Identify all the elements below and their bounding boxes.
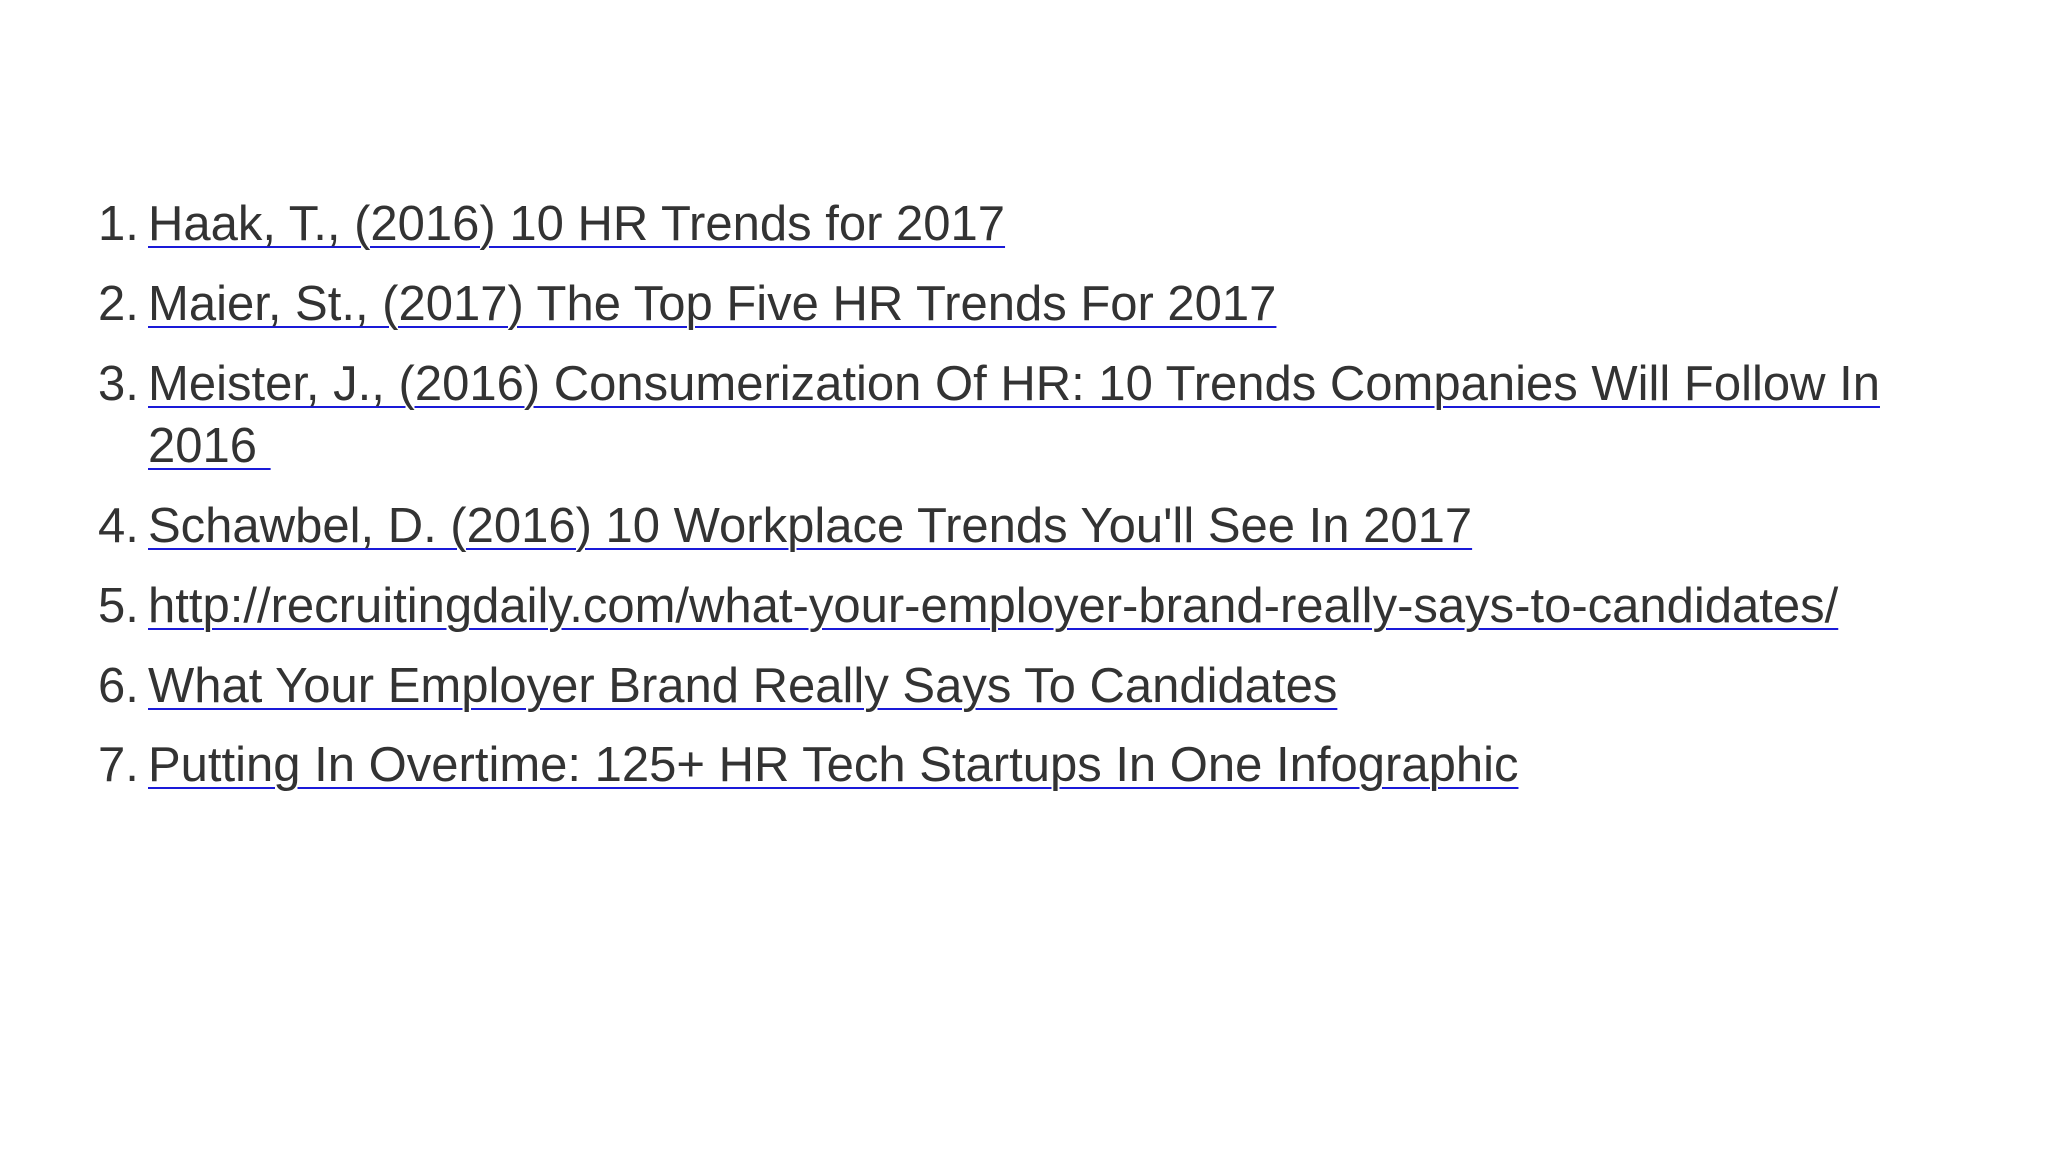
- reference 3: 3.: [98, 357, 139, 411]
- reference 1: Haak, T., (2016) 10 HR Trends for 2017: [148, 197, 1005, 251]
- reference 6: 6.: [98, 659, 139, 713]
- reference 1: 1.: [98, 197, 139, 251]
- reference 3: [98, 357, 1880, 473]
- reference 7: Putting In Overtime: 125+ HR Tech Startups In One Infographic: [148, 738, 1518, 792]
- reference 4: Schawbel, D. (2016) 10 Workplace Trends You'll See In 2017: [148, 499, 1472, 553]
- reference 5: 5.: [98, 579, 139, 633]
- reference 2: Maier, St., (2017) The Top Five HR Trends For 2017: [148, 277, 1276, 331]
- reference 2: 2.: [98, 277, 139, 331]
- reference 3: Meister, J., (2016) Consumerization Of HR: 10 Trends Companies Will Follow In: [148, 357, 1880, 411]
- reference 6: What Your Employer Brand Really Says To Candidates: [148, 659, 1337, 713]
- reference 3: 2016: [148, 419, 257, 473]
- reference 4: 4.: [98, 499, 139, 553]
- reference 7: 7.: [98, 738, 139, 792]
- reference 5: http://recruitingdaily.com/what-your-employer-brand-really-says-to-candidates/: [148, 579, 1838, 633]
